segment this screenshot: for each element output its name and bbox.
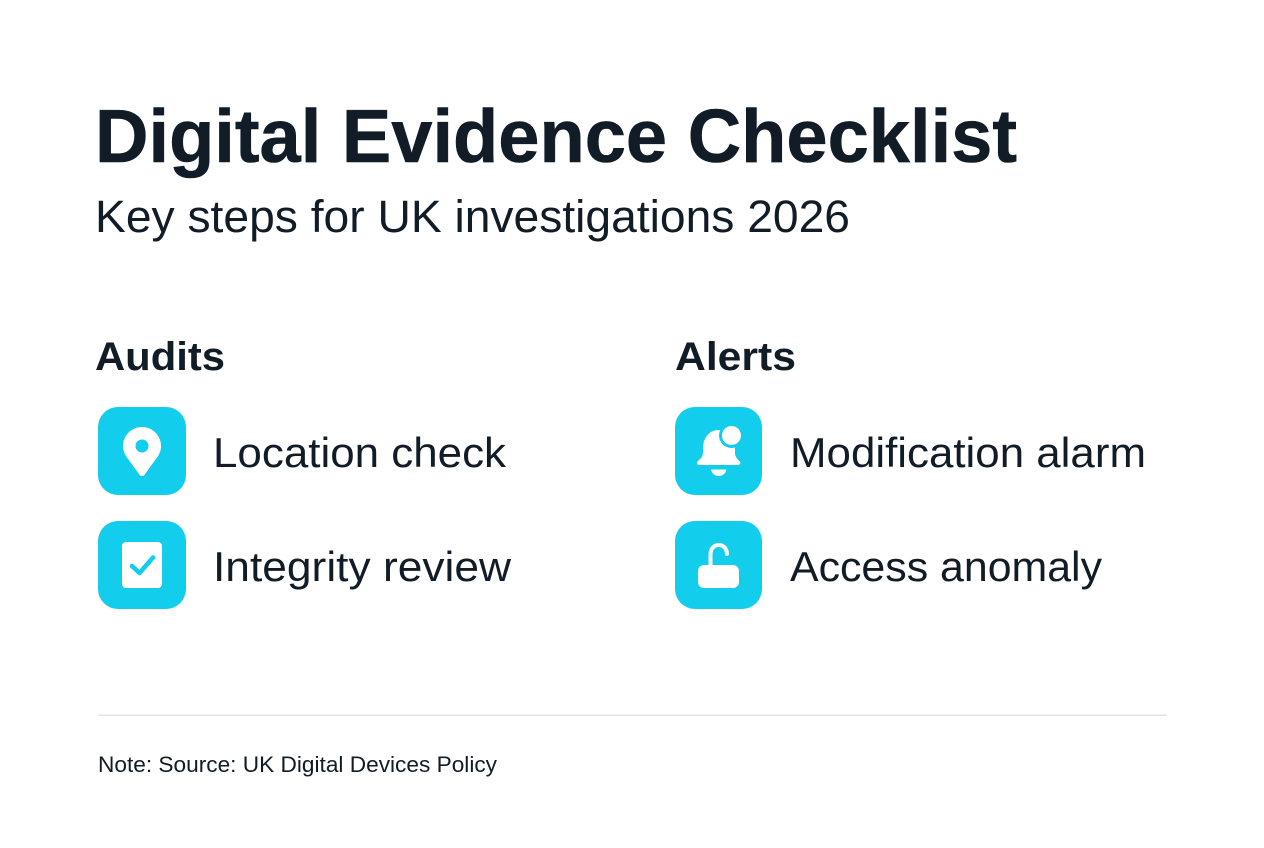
heading: audits: Audits — [95, 335, 225, 379]
panel: audits — [95, 335, 512, 609]
label: modification alarm: Modification alarm — [790, 429, 1146, 476]
subtitle: Key steps for UK investigations 2026 — [95, 191, 850, 242]
title: Digital Evidence Checklist — [95, 94, 1017, 178]
panel: alerts — [675, 335, 1146, 609]
footnote: Note: Source: UK Digital Devices Policy — [98, 752, 497, 777]
icon: location pin — [98, 407, 186, 495]
icon: open padlock — [675, 521, 762, 609]
label: location check: Location check — [213, 429, 507, 476]
icon: bell with notification dot — [675, 407, 762, 495]
label: integrity review: Integrity review — [213, 543, 512, 590]
label: access anomaly: Access anomaly — [790, 543, 1102, 590]
heading: alerts: Alerts — [675, 335, 796, 379]
icon: checked document — [98, 521, 186, 609]
